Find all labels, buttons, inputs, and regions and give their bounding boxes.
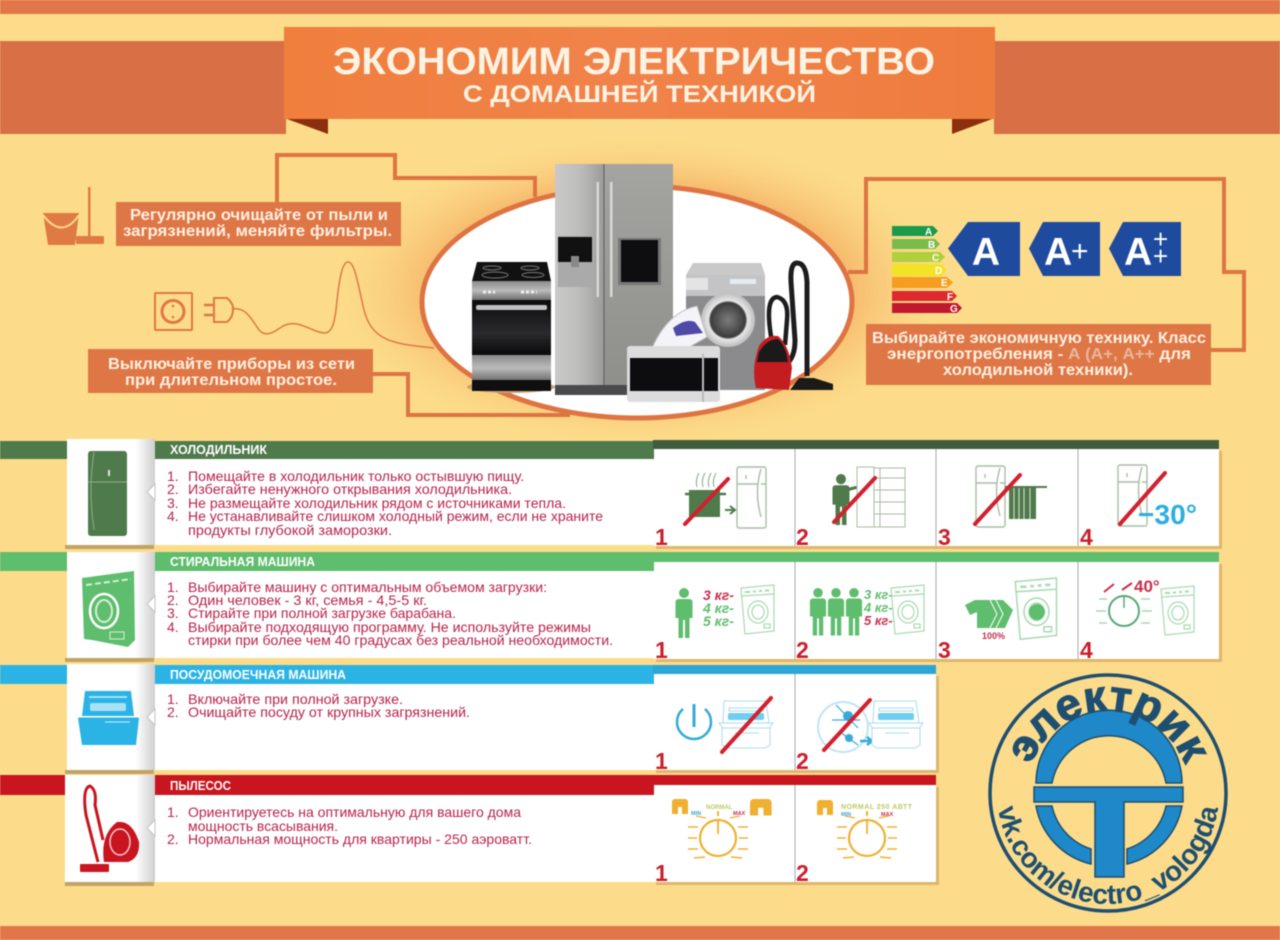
label: class A++: +: [1153, 224, 1168, 254]
pictogram: power dial: MIN: [691, 811, 701, 817]
tips list: 1.: [167, 468, 179, 484]
label: class A: A: [972, 231, 1000, 274]
pictogram strip: refrigerator: [653, 440, 1222, 550]
pictogram: dirty dishes: 2: [796, 748, 809, 774]
pictogram: dirty dishes: [796, 700, 923, 774]
panel: washing machine: [0, 552, 654, 662]
tips list: Нормальная мощность для квартиры - 250 аэроватт.: [188, 831, 532, 847]
energy scale: C: [932, 253, 939, 264]
label: class A+: +: [1071, 235, 1089, 268]
connector: cleaning: [277, 155, 535, 204]
pictogram: near radiator: 3: [938, 524, 951, 550]
pictogram: hot pot: [655, 467, 766, 550]
bottom strip: [0, 926, 1280, 940]
vacuum cleaner: [754, 263, 833, 390]
iron: [652, 306, 707, 350]
tip box: unplug: Выключайте приборы из сети: [108, 356, 355, 373]
energy scale: E: [941, 278, 948, 289]
pictogram strip: washing machine: [653, 552, 1222, 663]
pictogram: family: [796, 585, 924, 663]
logo ring: [1034, 710, 1183, 877]
pictogram: 250 watts dial: MAX: [881, 812, 894, 818]
heading: ХОЛОДИЛЬНИК: [170, 442, 267, 457]
logo text: электрик: [1012, 686, 1208, 766]
fridge: [555, 164, 673, 395]
pictogram: 250 watts dial: NORMAL 250 АВТТ: [841, 804, 913, 811]
tip box: cleaning: [116, 202, 401, 246]
pictogram: full drum: 3: [938, 637, 951, 663]
tips list: [167, 804, 532, 847]
tips list: Включайте при полной загрузке.: [188, 691, 403, 707]
pictogram: 250 watts dial: [796, 800, 913, 886]
pictogram: hot pot: 1: [655, 524, 668, 550]
label: class A++: [1109, 222, 1181, 276]
pictogram: family: 3 кг-: [864, 587, 893, 602]
panel: vacuum cleaner: [0, 775, 654, 886]
tips list: Ориентируетесь на оптимальную для вашего дома: [188, 804, 521, 820]
tips list: 4.: [167, 508, 179, 524]
tips list: [167, 691, 470, 720]
tips list: 1.: [167, 804, 179, 820]
tips list: мощность всасывания.: [188, 818, 338, 834]
pictogram: one person: 3 кг-: [703, 587, 734, 603]
heading: ПЫЛЕСОС: [170, 778, 232, 793]
tips list: Стирайте при полной загрузке барабана.: [188, 605, 456, 621]
pictogram: 250 watts dial: 2: [796, 860, 809, 886]
icon: dishwasher: [78, 691, 139, 745]
energy scale: D: [935, 266, 942, 277]
microwave: [627, 346, 720, 402]
pictogram: minus thirty: [1080, 465, 1197, 550]
tips list: 2.: [167, 592, 179, 608]
tips list: 2.: [167, 831, 179, 847]
label: class A+: A: [1044, 231, 1072, 274]
washing machine: [686, 263, 765, 390]
tips list: Не устанавливайте слишком холодный режим, если не храните: [188, 508, 603, 524]
tip box: energy class: энергопотребления - А (А+, А++ для: [887, 346, 1191, 363]
title: ЭКОНОМИМ ЭЛЕКТРИЧЕСТВО: [333, 41, 935, 83]
oven: [467, 262, 555, 393]
tip box: unplug: [88, 349, 373, 393]
pictogram: open door: 2: [796, 524, 809, 550]
tips list: 4.: [167, 619, 179, 635]
energy scale: G: [950, 304, 958, 315]
pictogram: forty degrees: 4: [1080, 637, 1093, 663]
heading: СТИРАЛЬНАЯ МАШИНА: [170, 554, 316, 569]
pictogram: minus thirty: 4: [1080, 524, 1093, 550]
tips list: Выбирайте машину с оптимальным объемом загрузки:: [188, 579, 547, 595]
label: class A++: A: [1124, 231, 1152, 274]
label: class A+: [1029, 222, 1100, 276]
pictogram: full drum: 100%: [982, 631, 1005, 641]
pictogram: open door: [796, 467, 905, 550]
pictogram: one person: [655, 585, 774, 663]
pictogram: minus thirty: −30°: [1138, 499, 1197, 530]
pictogram strip: vacuum cleaner: [653, 775, 939, 886]
tips list: Не размещайте холодильник рядом с источниками тепла.: [188, 495, 566, 511]
icon: bucket and mop: [43, 187, 104, 245]
central glow: [320, 130, 960, 450]
pictogram: power dial: NORMAL: [706, 805, 733, 811]
pictogram: family: 5 кг-: [864, 613, 893, 628]
energy scale: B: [928, 240, 935, 251]
appliances: [467, 164, 833, 402]
tips list: 1.: [167, 691, 179, 707]
icon: washing machine: [82, 571, 135, 647]
pictogram: near radiator: [938, 466, 1047, 550]
stamp: electrician logo: [987, 672, 1229, 914]
tips list: 3.: [167, 605, 179, 621]
pictogram: power dial: 1: [655, 860, 668, 886]
tips list: [167, 579, 613, 648]
pictogram: power: 1: [655, 748, 668, 774]
energy scale: F: [947, 292, 953, 303]
pictogram strip: dishwasher: [653, 665, 939, 774]
tips list: Помещайте в холодильник только остывшую пищу.: [188, 468, 524, 484]
panel: refrigerator: [0, 439, 654, 549]
pictogram: one person: 4 кг-: [702, 600, 734, 616]
icon: vacuum cleaner: [80, 786, 139, 872]
label: class A++: +: [1153, 241, 1168, 271]
tips list: 3.: [167, 495, 179, 511]
icon: plug and cord: [204, 262, 434, 348]
tips list: 2.: [167, 481, 179, 497]
tips list: продукты глубокой заморозки.: [188, 522, 392, 538]
pictogram: full drum: [938, 578, 1056, 663]
pictogram: power: [655, 698, 773, 774]
pictogram: one person: 1: [655, 637, 668, 663]
energy scale: A: [925, 227, 932, 238]
pictogram: forty degrees: [1080, 577, 1194, 663]
tips list: Очищайте посуду от крупных загрязнений.: [188, 704, 470, 720]
tips list: 2.: [167, 704, 179, 720]
tip box: cleaning: загрязнений, меняйте фильтры.: [123, 223, 392, 240]
tips list: 1.: [167, 579, 179, 595]
tip box: energy class: холодильной техники).: [943, 362, 1133, 379]
tip box: energy class: [866, 324, 1211, 385]
pictogram: power dial: [655, 799, 772, 886]
tip box: energy class: Выбирайте экономичную технику. Класс: [872, 330, 1206, 347]
connector: unplug: [370, 374, 570, 415]
connector: energy class: [848, 179, 1244, 350]
tip box: unplug: при длительном простое.: [125, 372, 337, 389]
tips list: стирки при более чем 40 градусах без реальной необходимости.: [188, 632, 613, 648]
tips list: [167, 468, 603, 538]
logo url: vk.com/electro_vologda: [998, 804, 1219, 905]
appliances oval: [422, 186, 852, 418]
top strip: [0, 0, 1280, 14]
tips list: Избегайте ненужного открывания холодильника.: [188, 481, 512, 497]
title band: [0, 41, 1280, 134]
icon: socket: [155, 293, 192, 330]
pictogram: 250 watts dial: MIN: [841, 812, 851, 818]
pictogram: forty degrees: 40°: [1134, 577, 1160, 596]
heading: ПОСУДОМОЕЧНАЯ МАШИНА: [170, 667, 347, 682]
subtitle: С ДОМАШНЕЙ ТЕХНИКОЙ: [463, 80, 816, 108]
pictogram: power dial: MAX: [733, 811, 746, 817]
tips list: Один человек - 3 кг, семья - 4,5-5 кг.: [188, 592, 427, 608]
panel: dishwasher: [0, 664, 654, 774]
title banner: [284, 27, 995, 134]
pictogram: family: 2: [796, 637, 809, 663]
icon: refrigerator: [88, 451, 127, 536]
pictogram: family: 4 кг-: [863, 600, 893, 615]
pictogram: one person: 5 кг-: [703, 613, 734, 629]
energy scale: [892, 226, 962, 315]
tips list: Выбирайте подходящую программу. Не используйте режимы: [188, 619, 591, 635]
tip box: cleaning: Регулярно очищайте от пыли и: [130, 207, 388, 224]
label: class A: [948, 222, 1020, 276]
